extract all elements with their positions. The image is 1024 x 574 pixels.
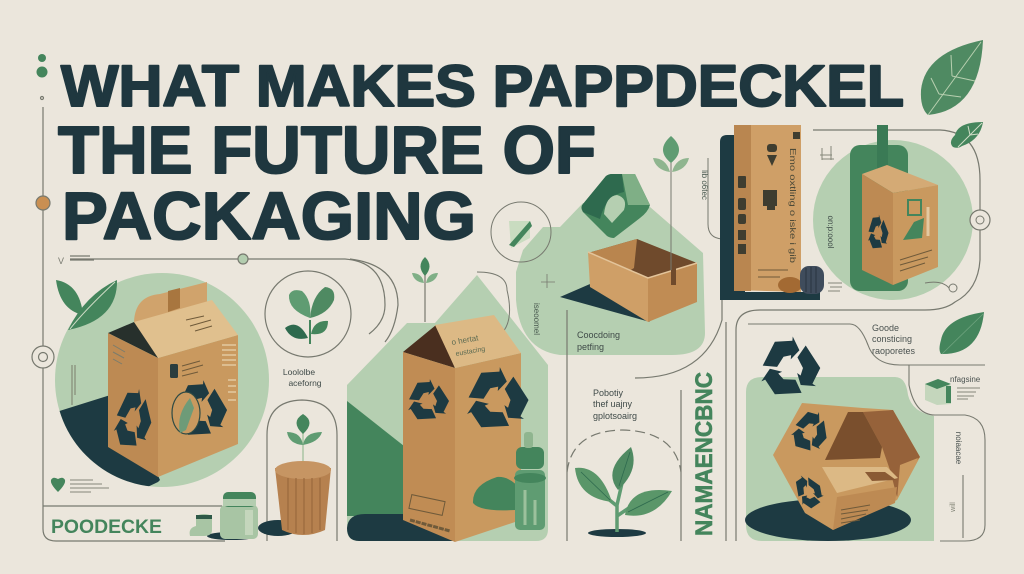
green bottle bbox=[514, 432, 546, 530]
panel: right circle carton bbox=[736, 125, 990, 541]
caption: Goode: consticing bbox=[872, 334, 912, 344]
rotated label: will: will bbox=[950, 502, 957, 513]
lines: centre bottom bbox=[567, 300, 726, 541]
recycle hexagon icon bbox=[582, 174, 650, 238]
caption: Goode: Goode bbox=[872, 323, 899, 333]
panel: open box hexagon bbox=[516, 136, 705, 355]
title bbox=[58, 54, 904, 254]
panel: circle plant bbox=[265, 271, 351, 357]
small ring with green fold bbox=[491, 202, 551, 262]
heart icon with lines bbox=[51, 478, 109, 492]
leaves bbox=[56, 280, 83, 315]
title: PACKAGING bbox=[62, 179, 476, 254]
rotated label: circle: on:p:oool bbox=[826, 216, 835, 249]
panel: tall carton with roller bbox=[708, 125, 824, 300]
left timeline dots and frame bbox=[32, 54, 398, 541]
title: WHAT MAKES PAPPDECKEL bbox=[61, 54, 904, 119]
brand label: POODECKE bbox=[51, 517, 162, 538]
panel: tall carton with roller: Emo oxtling o iske i gib bbox=[788, 148, 797, 264]
panel: house with tall carton: o hertat bbox=[451, 333, 480, 347]
rotated label: id: lib o6tec bbox=[700, 170, 709, 200]
icon: sapling bbox=[575, 447, 672, 537]
icon: small leaf top right bbox=[951, 122, 983, 148]
small v label: V bbox=[58, 256, 64, 266]
icon: leaf lower right bbox=[940, 312, 984, 354]
icon: mini box with label: nfagsine bbox=[950, 375, 981, 384]
caption: Goode: raoporetes bbox=[872, 346, 916, 356]
caption: Poboty: thef uajny bbox=[593, 399, 633, 409]
vertical green label: NAMAENCBNC bbox=[691, 372, 718, 536]
open box bbox=[560, 284, 650, 322]
cardboard box bbox=[134, 282, 207, 322]
panel: main box circle bbox=[50, 273, 269, 500]
title: THE FUTURE OF bbox=[58, 113, 596, 188]
caption: Poboty: gplotsoairg bbox=[593, 411, 637, 421]
panel: house with tall carton bbox=[347, 257, 548, 542]
icon: large leaf top right bbox=[921, 40, 983, 115]
panel: house with tall carton: eustacing bbox=[455, 346, 486, 358]
rotated label: right: noiaacae bbox=[954, 432, 963, 465]
box shadow bbox=[60, 396, 160, 486]
icon: small jar and cup bbox=[190, 492, 258, 540]
caption: Loolaibe: Loololbe bbox=[283, 367, 315, 377]
panel: arch with potted plant bbox=[258, 400, 337, 541]
rotated label: panel left: iseoomel bbox=[532, 303, 541, 335]
caption: Coocdoing: petfing bbox=[577, 342, 604, 352]
tall carton bbox=[403, 325, 455, 368]
panel: hexagonal box bbox=[745, 324, 985, 541]
icon: dark recycle bbox=[758, 336, 831, 407]
caption: Loolaibe: aceforng bbox=[288, 378, 322, 388]
caption: Coocdoing: Coocdoing bbox=[577, 330, 620, 340]
caption: Poboty: Pobotiy bbox=[593, 388, 624, 398]
icon: mini box with label bbox=[925, 375, 981, 405]
